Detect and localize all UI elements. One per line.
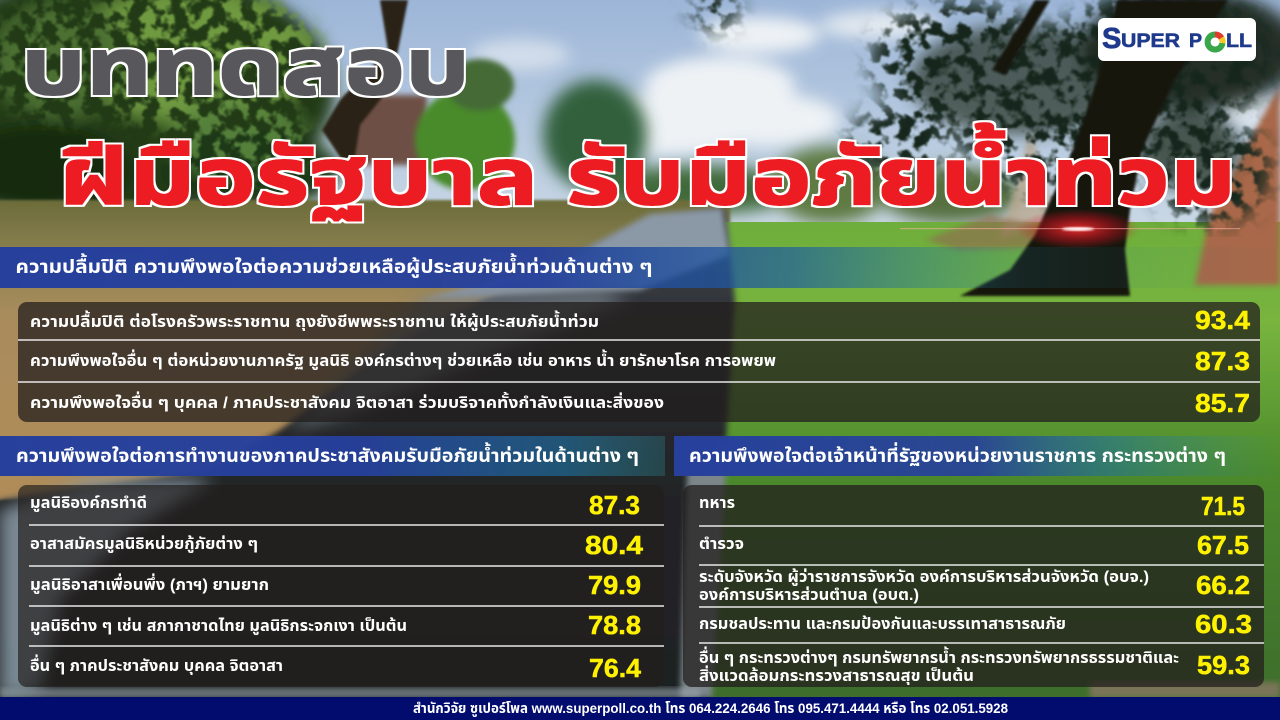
footer contact bar	[0, 697, 1280, 720]
row value: 71.5	[1201, 491, 1245, 521]
plastic sheet over sandbags	[0, 208, 735, 720]
logo: Super Poll: LL	[1226, 30, 1252, 52]
logo: Super Poll	[1098, 18, 1256, 61]
row value: 59.3	[1197, 650, 1250, 680]
heading: recovery and relief satisfaction: ความปลื้มปิติ ความพึงพอใจต่อความช่วยเหลือผู้ประสบภัยน้ำท่วมด้านต่าง ๆ	[16, 253, 652, 278]
heading: civil society	[0, 436, 665, 476]
row value: 79.9	[588, 570, 641, 600]
row 1 label: ความปลื้มปิติ ต่อโรงครัวพระราชทาน ถุงยังชีพพระราชทาน ให้ผู้ประสบภัยน้ำท่วม	[30, 310, 599, 332]
row label: soldiers: ทหาร	[699, 495, 735, 512]
row value: 87.3	[589, 490, 640, 520]
row label: police: ตำรวจ	[699, 536, 744, 553]
row label: other ministries: สิ่งแวดล้อมกระทรวงสาธารณสุข เป็นต้น	[699, 665, 974, 685]
logo: Super Poll: P	[1189, 30, 1202, 52]
row label: provincial level	[699, 568, 1149, 604]
row label: provincial level: ระดับจังหวัด ผู้ว่าราชการจังหวัด องค์การบริหารส่วนจังหวัด (อบจ.)	[699, 568, 1149, 587]
left tree mass	[0, 0, 1020, 223]
heading: civil society: ความพึงพอใจต่อการทำงานของภาคประชาสังคมรับมือภัยน้ำท่วมในด้านต่าง ๆ	[16, 442, 639, 467]
row label: other ministries	[699, 646, 1179, 685]
red lens flare	[900, 209, 1240, 249]
row label: provincial level: องค์การบริหารส่วนตำบล (อบต.)	[699, 586, 919, 604]
row value: 66.2	[1196, 570, 1250, 600]
row 2 label: ความพึงพอใจอื่น ๆ ต่อหน่วยงานภาครัฐ มูลนิธิ องค์กรต่างๆ ช่วยเหลือ เช่น อาหาร น้ำ ยารักษาโรค การอพยพ	[30, 349, 776, 371]
row 3 label: ความพึงพอใจอื่น ๆ บุคคล / ภาคประชาสังคม จิตอาสา ร่วมบริจาคทั้งกำลังเงินและสิ่งของ	[30, 391, 664, 412]
row label: other foundations: มูลนิธิต่าง ๆ เช่น สภากาชาดไทย มูลนิธิกระจกเงา เป็นต้น	[30, 617, 407, 636]
icon: poll ring	[1208, 34, 1223, 49]
right tree canopy	[910, 0, 1280, 190]
row label: other civil society: อื่น ๆ ภาคประชาสังคม บุคคล จิตอาสา	[30, 654, 283, 675]
title: line 2: ฝีมือรัฐบาล รับมือภัยน้ำท่วม	[59, 123, 1236, 221]
heading: recovery and relief satisfaction	[0, 247, 1280, 288]
row label: good-deed foundation: มูลนิธิองค์กรทำดี	[30, 495, 147, 513]
row value: 76.4	[589, 653, 642, 683]
row label: rescue volunteers: อาสาสมัครมูลนิธิหน่วยกู้ภัยต่าง ๆ	[30, 535, 258, 554]
logo: Super Poll: S	[1102, 23, 1121, 55]
row label: irrigation and disaster departments: กรมชลประทาน และกรมป้องกันและบรรเทาสาธารณภัย	[699, 615, 1066, 633]
title: line 1: บททดสอบ	[21, 23, 470, 111]
row value: 60.3	[1195, 609, 1252, 639]
panel: state officials rows	[683, 485, 1264, 687]
row value: 67.5	[1197, 530, 1249, 560]
row 1 value: 93.4	[1195, 305, 1251, 335]
temple ruins	[1195, 85, 1280, 285]
row value: 78.8	[588, 610, 641, 640]
row label: Paw Puan foundation: มูลนิธิอาสาเพื่อนพึ่ง (ภาฯ) ยามยาก	[30, 573, 269, 595]
logo: Super Poll: UPER	[1121, 30, 1180, 52]
row 2 value: 87.3	[1195, 346, 1250, 376]
panel: recovery and relief rows	[18, 302, 1260, 422]
row 3 value: 85.7	[1195, 388, 1250, 418]
heading: state officials	[674, 436, 1280, 476]
heading: state officials: ความพึงพอใจต่อเจ้าหน้าที่รัฐของหน่วยงานราชการ กระทรวงต่าง ๆ	[689, 442, 1226, 467]
row value: 80.4	[585, 530, 644, 560]
panel: civil society rows	[18, 485, 664, 687]
footer contact bar: สำนักวิจัย ซูเปอร์โพล www.superpoll.co.th โทร 064.224.2646 โทร 095.471.4444 หรือ โทร 02.051.5928	[413, 700, 1008, 718]
row label: other ministries: อื่น ๆ กระทรวงต่างๆ กรมทรัพยากรน้ำ กระทรวงทรัพยากรธรรมชาติและ	[699, 646, 1179, 667]
